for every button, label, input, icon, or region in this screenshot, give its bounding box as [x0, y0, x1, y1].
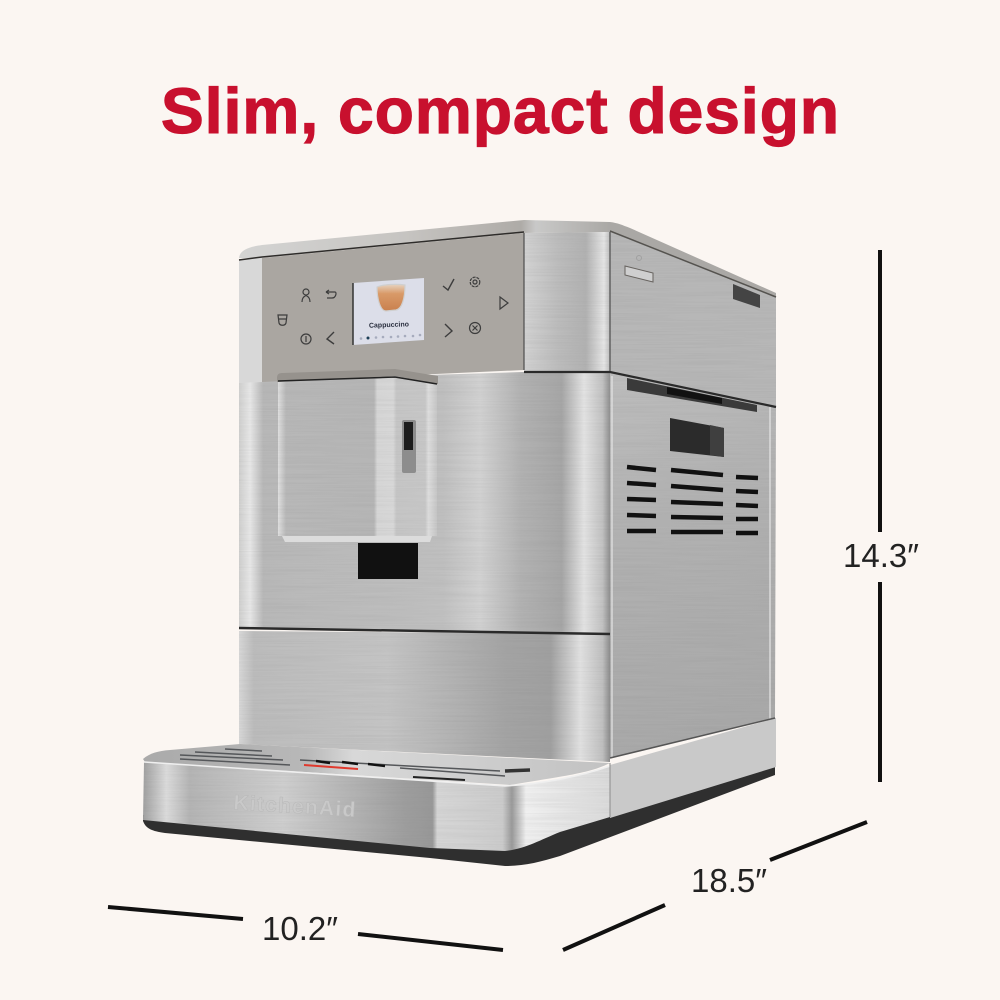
display screen [353, 278, 424, 345]
dispenser module [277, 369, 438, 579]
lower right side panel [610, 373, 776, 758]
water tank handle [625, 266, 653, 282]
side air slot [627, 378, 757, 412]
screen label: Cappuccino [369, 321, 409, 330]
tray front face [143, 762, 610, 851]
icon: gear [470, 277, 480, 287]
lower front body [239, 631, 610, 762]
middle front body [239, 372, 610, 633]
width dimension [108, 907, 503, 950]
side grip recess [670, 418, 724, 457]
icon: cup [278, 315, 287, 325]
upper-right front strip [524, 232, 610, 373]
icon: right chevron [445, 324, 452, 337]
icon: check [443, 279, 454, 290]
dispenser slider [402, 420, 416, 473]
upper-left front strip [239, 258, 262, 383]
tray grille slots [180, 749, 530, 780]
title: Slim, compact design [161, 75, 839, 147]
icon: back [326, 290, 336, 298]
tray grid top [143, 744, 610, 785]
height label: 14.3″ [843, 537, 919, 574]
control icons [278, 277, 508, 344]
upper right side panel [610, 231, 776, 407]
icon: cancel [470, 322, 480, 334]
red water indicator [304, 765, 358, 769]
divider line between drawer and body [239, 628, 610, 634]
top lid [239, 220, 776, 298]
side vents [627, 467, 758, 533]
depth dimension [563, 822, 867, 950]
coffee machine illustration [143, 220, 776, 866]
icon: timer [301, 334, 311, 344]
width label: 10.2″ [262, 910, 338, 947]
page dots [360, 334, 421, 340]
icon: play [500, 297, 508, 309]
coffee spout opening [358, 543, 418, 579]
side base [610, 718, 776, 818]
brand embossing: KitchenAid [233, 791, 356, 822]
control panel [262, 233, 524, 382]
depth label: 18.5″ [691, 862, 767, 899]
rear latch [733, 284, 760, 308]
icon: person [302, 289, 310, 302]
rubber base [143, 765, 775, 866]
icon: cappuccino cup [377, 284, 405, 311]
icon: left chevron [327, 332, 334, 344]
